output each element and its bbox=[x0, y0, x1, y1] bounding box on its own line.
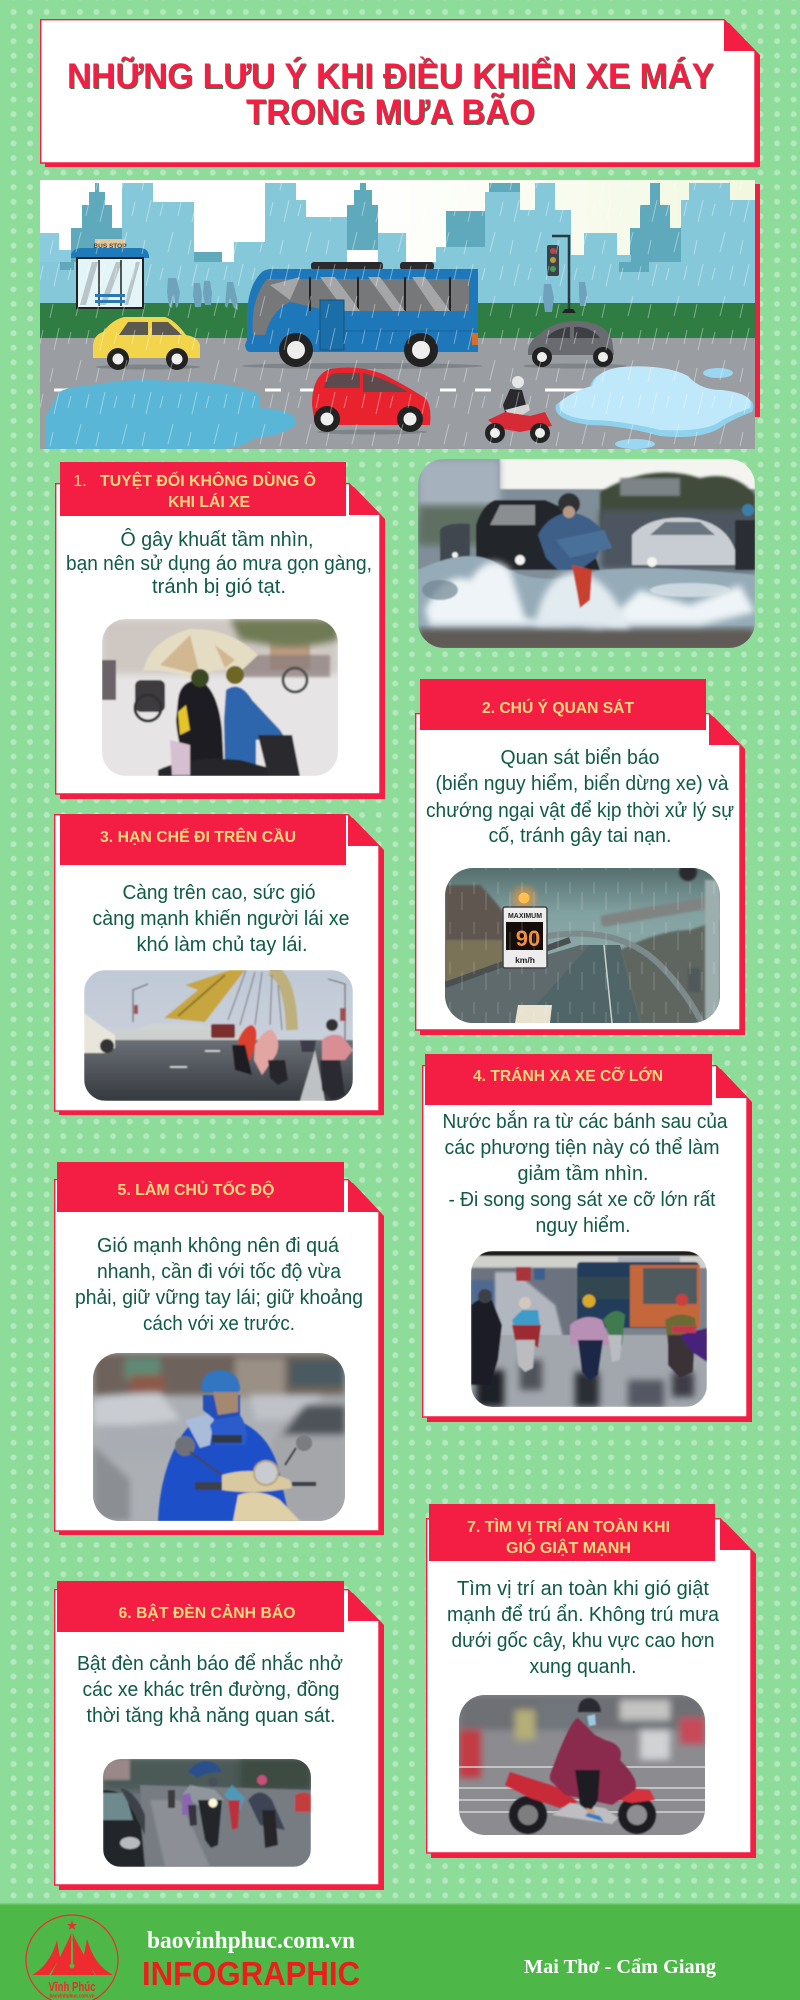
card 7 heading ribbon: 7. TÌM VỊ TRÍ AN TOÀN KHI bbox=[467, 1517, 670, 1536]
card 7 text: Tìm vị trí an toàn khi gió giật bbox=[457, 1578, 709, 1600]
card 2 photo: speed sign in storm bbox=[445, 863, 720, 1023]
title bbox=[67, 56, 714, 132]
pedestrians bbox=[167, 278, 587, 312]
card 5 bbox=[55, 1162, 384, 1535]
footer band bbox=[0, 1903, 800, 2000]
red car bbox=[312, 367, 430, 434]
card 1 photo: umbrella on motorbike bbox=[102, 619, 338, 776]
right puddle bbox=[556, 366, 753, 449]
card 1 heading ribbon: TUYỆT ĐỐI KHÔNG DÙNG Ô bbox=[100, 470, 316, 490]
card 5 text: nhanh, cần đi với tốc độ vừa bbox=[97, 1261, 342, 1283]
card 2 text: (biển nguy hiểm, biển dừng xe) và bbox=[436, 773, 729, 795]
card 3 bbox=[55, 814, 384, 1115]
illustration: city street in rain bbox=[40, 180, 760, 449]
title: TRONG MƯA BÃO bbox=[246, 93, 535, 132]
card 4 photo: bikes beside bus bbox=[471, 1251, 707, 1407]
card 4 text: Nước bắn ra từ các bánh sau của bbox=[442, 1110, 728, 1133]
road bbox=[40, 338, 755, 449]
card 2 bbox=[416, 679, 745, 1035]
card 4 text: - Đi song song sát xe cỡ lớn rất bbox=[448, 1189, 716, 1211]
card 2 text: Quan sát biển báo bbox=[500, 747, 660, 769]
card 3 text: Càng trên cao, sức gió bbox=[122, 882, 316, 904]
card 5 text: Gió mạnh không nên đi quá bbox=[97, 1235, 340, 1257]
card 6 heading ribbon: 6. BẬT ĐÈN CẢNH BÁO bbox=[118, 1603, 296, 1622]
speed sign bbox=[503, 907, 547, 968]
card 5 heading ribbon bbox=[57, 1162, 344, 1212]
card 1 text bbox=[66, 528, 372, 598]
speed sign: MAXIMUM bbox=[508, 913, 542, 920]
Vinh Phuc logo: ★ bbox=[66, 1920, 78, 1932]
title panel bbox=[41, 19, 760, 167]
card 7 text: xung quanh. bbox=[530, 1656, 636, 1678]
traffic light bbox=[547, 236, 576, 313]
card 6 text bbox=[77, 1652, 343, 1727]
card 4 heading ribbon bbox=[425, 1054, 712, 1105]
authors: Mai Thơ - Cẩm Giang bbox=[524, 1956, 716, 1978]
card 5 text: phải, giữ vững tay lái; giữ khoảng bbox=[75, 1287, 363, 1309]
card 6 text: Bật đèn cảnh báo để nhắc nhở bbox=[77, 1652, 343, 1675]
card 6 text: các xe khác trên đường, đồng bbox=[82, 1679, 340, 1701]
card 5 text bbox=[75, 1235, 363, 1335]
card 2 text: cố, tránh gây tai nạn. bbox=[488, 825, 672, 847]
card 1 bbox=[56, 462, 385, 799]
card 3 text: khó làm chủ tay lái. bbox=[136, 934, 308, 956]
grass bbox=[40, 303, 755, 339]
card 2 text: chướng ngại vật để kịp thời xử lý sự bbox=[426, 800, 734, 822]
card 6 text: thời tăng khả năng quan sát. bbox=[86, 1705, 336, 1727]
card 7 text: dưới gốc cây, khu vực cao hơn bbox=[452, 1630, 714, 1652]
motorbike rider bbox=[485, 376, 552, 443]
card 4 text: nguy hiểm. bbox=[536, 1215, 630, 1237]
card 6 heading ribbon bbox=[57, 1581, 344, 1632]
card 1 text: tránh bị gió tạt. bbox=[152, 576, 286, 598]
card 7 photo: red motorbike in motion bbox=[459, 1695, 705, 1835]
card 5 text: cách với xe trước. bbox=[143, 1313, 295, 1335]
card 1 heading ribbon: 1. bbox=[73, 473, 87, 490]
speed sign: 90 bbox=[516, 926, 540, 951]
infographic label: INFOGRAPHIC bbox=[142, 1955, 360, 1992]
left puddle bbox=[45, 380, 296, 449]
card 6 bbox=[55, 1581, 384, 1890]
speed sign: km/h bbox=[515, 955, 535, 965]
card 3 text: càng mạnh khiến người lái xe bbox=[92, 908, 350, 930]
bus bbox=[242, 262, 482, 369]
card 7 bbox=[427, 1504, 756, 1858]
rain streaks bbox=[40, 180, 755, 449]
card 5 photo: man in blue raincoat bbox=[93, 1353, 345, 1521]
card 4 heading ribbon: 4. TRÁNH XA XE CỠ LỚN bbox=[473, 1065, 663, 1085]
card 2 text bbox=[426, 747, 734, 847]
title: NHỮNG LƯU Ý KHI ĐIỀU KHIỂN XE MÁY bbox=[67, 56, 714, 96]
card 1 text: Ô gây khuất tầm nhìn, bbox=[120, 528, 314, 551]
card 7 heading ribbon bbox=[429, 1504, 715, 1561]
skyline buildings bbox=[40, 183, 755, 305]
card 7 heading ribbon: GIÓ GIẬT MẠNH bbox=[506, 1538, 631, 1557]
photo: rider through flood bbox=[418, 459, 755, 652]
card 1 heading ribbon: KHI LÁI XE bbox=[168, 492, 250, 511]
gray car bbox=[523, 321, 627, 368]
card 3 heading ribbon: 3. HẠN CHẾ ĐI TRÊN CẦU bbox=[100, 827, 296, 846]
card 4 bbox=[423, 1054, 752, 1422]
card 2 heading ribbon: 2. CHÚ Ý QUAN SÁT bbox=[482, 698, 634, 717]
card 4 text: giảm tầm nhìn. bbox=[518, 1163, 648, 1185]
bus stop: BUS STOP bbox=[93, 243, 127, 250]
card 5 heading ribbon: 5. LÀM CHỦ TỐC ĐỘ bbox=[118, 1179, 274, 1199]
card 4 text bbox=[442, 1110, 728, 1237]
card 6 photo: bikes with headlights bbox=[103, 1759, 311, 1867]
bus stop bbox=[71, 239, 149, 308]
site name: baovinhphuc.com.vn bbox=[147, 1928, 355, 1954]
card 1 heading ribbon bbox=[60, 462, 346, 516]
Vinh Phuc logo: baovinhphuc.com.vn bbox=[50, 1994, 94, 2000]
card 4 text: các phương tiện này có thể làm bbox=[444, 1137, 720, 1159]
Vinh Phuc logo: Vĩnh Phúc bbox=[48, 1979, 96, 1994]
yellow car bbox=[93, 317, 200, 370]
card 1 text: bạn nên sử dụng áo mưa gọn gàng, bbox=[66, 553, 372, 575]
card 2 heading ribbon bbox=[420, 679, 706, 730]
card 7 text bbox=[447, 1578, 720, 1678]
card 3 heading ribbon bbox=[60, 814, 346, 865]
Vinh Phuc logo bbox=[26, 1915, 118, 2000]
card 7 text: mạnh để trú ẩn. Không trú mưa bbox=[447, 1604, 720, 1626]
card 3 photo: bridge in rain bbox=[84, 970, 353, 1101]
card 3 text bbox=[92, 882, 350, 956]
